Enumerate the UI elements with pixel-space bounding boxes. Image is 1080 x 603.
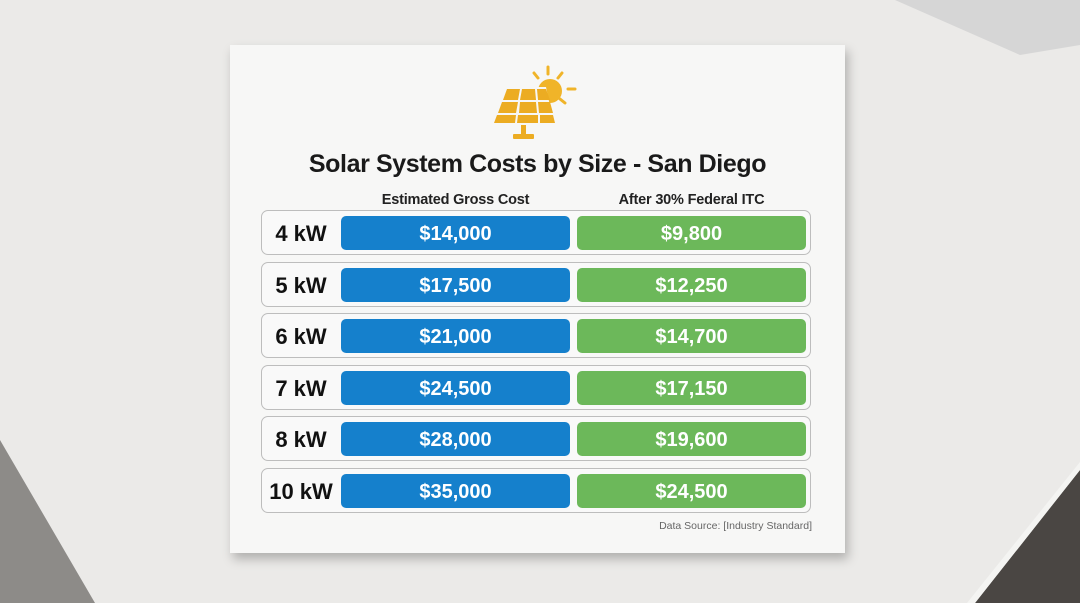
row: 4 kW: $14,000 — [419, 223, 492, 245]
row: 8 kW: 8 kW — [275, 427, 327, 452]
row: 6 kW — [261, 313, 811, 358]
row: 6 kW: $21,000 — [419, 326, 492, 348]
row: 5 kW — [261, 262, 811, 307]
row: 10 kW — [261, 468, 811, 513]
row: 4 kW: $9,800 — [661, 223, 722, 245]
column header: gross: Estimated Gross Cost — [382, 192, 529, 208]
row: 7 kW — [261, 365, 811, 410]
row: 10 kW: 10 kW — [269, 479, 333, 504]
row: 7 kW: $17,150 — [655, 378, 728, 400]
row: 7 kW: $24,500 — [419, 378, 492, 400]
row: 6 kW: 6 kW — [275, 324, 327, 349]
row: 10 kW: $35,000 — [419, 481, 492, 503]
panel: paper card — [230, 45, 845, 553]
row: 4 kW — [261, 210, 811, 255]
row: 4 kW: 4 kW — [275, 221, 327, 246]
row: 8 kW — [261, 416, 811, 461]
row: 8 kW: $28,000 — [419, 429, 492, 451]
row: 7 kW: 7 kW — [275, 376, 327, 401]
row: 8 kW: $19,600 — [655, 429, 728, 451]
row: 5 kW: 5 kW — [275, 273, 327, 298]
row: 5 kW: $17,500 — [419, 275, 492, 297]
icon: solar panel with sun — [494, 66, 576, 139]
row: 5 kW: $12,250 — [655, 275, 728, 297]
row: 6 kW: $14,700 — [655, 326, 728, 348]
column header: after ITC: After 30% Federal ITC — [619, 192, 764, 208]
row: 10 kW: $24,500 — [655, 481, 728, 503]
data source note: Data Source: [Industry Standard] — [659, 520, 812, 532]
title: Solar System Costs by Size - San Diego — [309, 150, 766, 178]
